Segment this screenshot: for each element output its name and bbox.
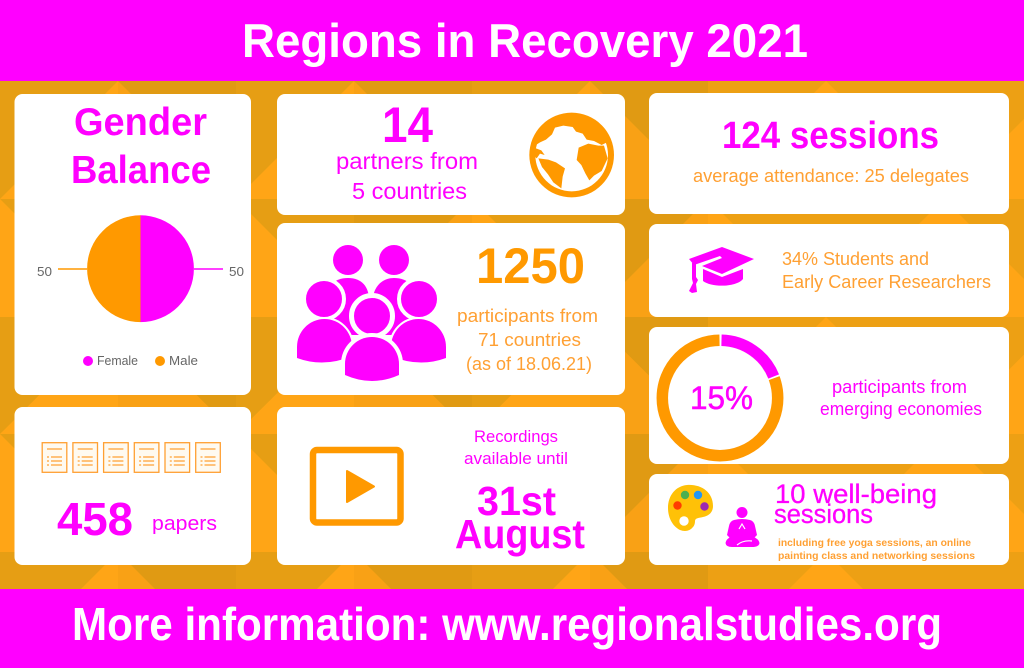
panel: emerging economies — [649, 327, 1009, 464]
text: participants from emerging economies: emerging economies — [820, 399, 982, 419]
text: average attendance: average attendance: 25 delegates — [693, 165, 969, 186]
panel: papers — [14, 407, 251, 565]
icon: yoga figure — [726, 507, 760, 547]
date: 31st August: August — [455, 511, 585, 557]
stat: 1250 participants: participants from — [457, 305, 598, 326]
stat: 1250 participants: 1250 — [476, 238, 585, 294]
header banner — [0, 0, 1024, 81]
panel: gender balance — [14, 94, 251, 395]
stat: 14 partners: 14 — [382, 97, 433, 153]
pie chart: female 50, male 50: 50 — [37, 264, 52, 279]
stat: 1250 participants: 71 countries — [478, 329, 581, 350]
donut chart — [662, 340, 778, 456]
icon: group of people — [297, 245, 446, 381]
text: well-being details: including free yoga sessions, an online — [778, 537, 971, 549]
icon: video play — [313, 450, 400, 522]
pie legend: Male — [169, 353, 198, 368]
stat: 15%: 15% — [690, 380, 753, 416]
stat: 1250 participants — [457, 238, 598, 374]
stat: 14 partners: partners from — [336, 148, 478, 174]
text: recordings available until: Recordings — [474, 428, 558, 446]
panel: partners — [277, 94, 625, 215]
title: Regions in Recovery 2021 — [242, 14, 808, 67]
panel: sessions — [649, 93, 1009, 214]
text: recordings available until: available until — [464, 450, 568, 468]
text: students and researchers: Early Career Researchers — [782, 271, 991, 292]
pie chart: female 50, male 50: 50 — [229, 264, 244, 279]
pie chart: female 50, male 50 — [37, 215, 244, 322]
stat: 458 papers: 458 — [57, 493, 133, 545]
icon: globe — [529, 113, 614, 197]
stat: 14 partners: 5 countries — [352, 178, 467, 204]
footer link text: More information: www.regionalstudies.org — [72, 598, 942, 650]
panel: students — [649, 224, 1009, 317]
pie legend — [83, 353, 198, 368]
panel: recordings — [277, 407, 625, 565]
heading: gender balance: Balance — [71, 149, 211, 192]
stat: 1250 participants: (as of 18.06.21) — [466, 353, 592, 374]
heading: gender balance: Gender — [74, 101, 207, 144]
text: students and researchers: 34% Students and — [782, 248, 929, 269]
pie legend: Female — [97, 353, 138, 368]
text: well-being details: painting class and networking sessions — [778, 550, 975, 562]
panel: well-being — [649, 474, 1009, 565]
panel: participants — [277, 223, 625, 395]
heading: 10 well-being sessions: sessions — [774, 499, 873, 529]
footer banner — [0, 589, 1024, 668]
icon: paint palette — [668, 485, 713, 531]
stat: 458 papers: papers — [152, 513, 217, 535]
stat: 14 partners — [336, 97, 478, 204]
text: participants from emerging economies: participants from — [832, 377, 967, 397]
stat: 458 papers — [57, 493, 217, 545]
icon: graduation cap — [689, 247, 754, 293]
heading: 10 well-being sessions: 10 well-being — [775, 479, 937, 509]
icon: six documents — [42, 443, 220, 472]
stat: 124 sessions: 124 sessions — [722, 115, 939, 157]
date: 31st August: 31st — [477, 478, 556, 524]
